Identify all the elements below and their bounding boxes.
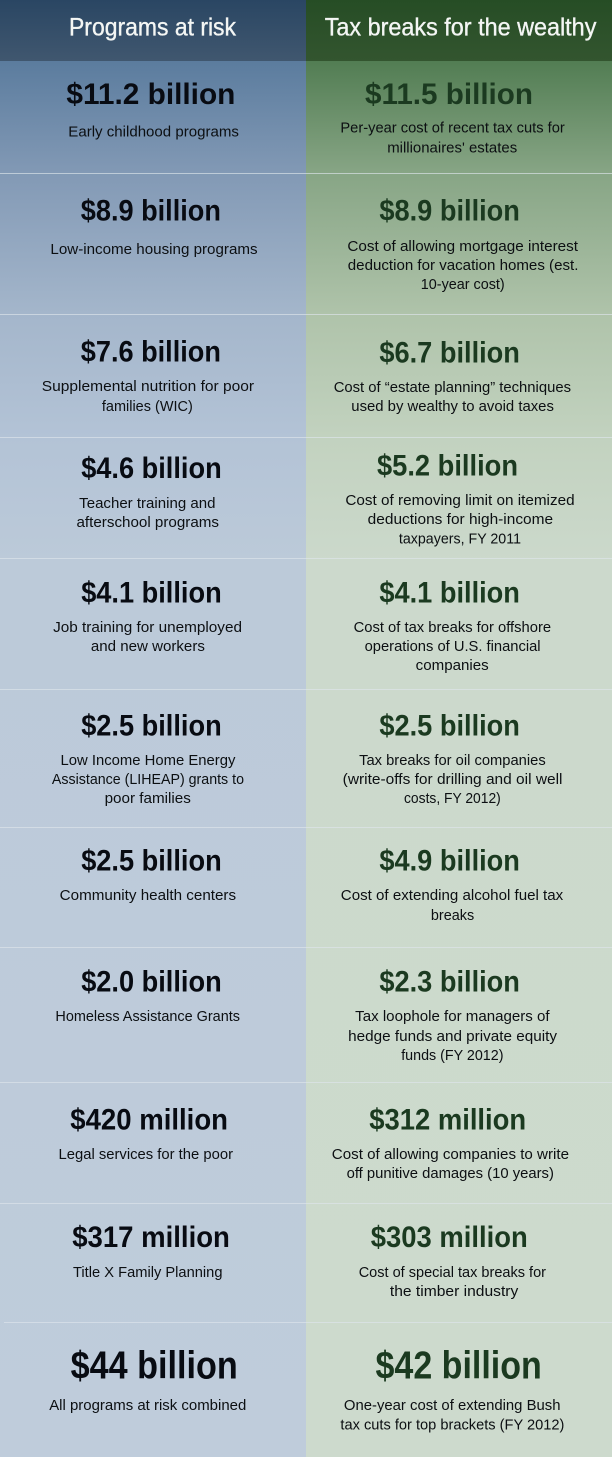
row 9 left: legal services: $420 million [70,1104,228,1137]
row 2 left: low-income housing: Low-income housing programs [50,241,258,258]
row 3 right: estate planning: $6.7 billion [379,336,520,369]
row 8 right: hedge fund loophole [348,965,558,1064]
row 4 right: itemized deductions limit: taxpayers, FY 2011 [399,530,521,548]
row 1 right: millionaires' estates tax cuts [340,78,565,157]
row 4 right: itemized deductions limit [345,449,575,548]
row 3 right: estate planning [334,336,571,415]
row 8 left: homeless assistance: Homeless Assistance Grants [55,1008,240,1025]
row 6 right: oil company tax breaks: Tax breaks for oil companies [359,752,546,769]
header: tax breaks for the wealthy: Tax breaks for the wealthy [325,14,597,42]
row 5 right: offshore tax breaks: companies [416,657,489,674]
row 7 right: alcohol fuel tax breaks: $4.9 billion [379,845,520,878]
row 9 right: punitive damages write-off [332,1104,569,1182]
row 7 left: community health centers [60,845,236,904]
row 3 right: estate planning: used by wealthy to avoid taxes [351,398,554,415]
row 7 left: community health centers: Community health centers [60,887,236,904]
row 1 right: millionaires' estates tax cuts: Per-year cost of recent tax cuts for [340,120,565,137]
row 3 right: estate planning: Cost of “estate planning” techniques [334,379,571,396]
row 10 right: timber industry tax breaks: Cost of special tax breaks for [359,1264,546,1281]
row 10 left: title X family planning: $317 million [72,1221,230,1254]
row 2 left: low-income housing [50,195,258,258]
row 2 right: mortgage interest deduction: Cost of allowing mortgage interest [347,238,579,255]
total left: all programs at risk combined [49,1345,246,1414]
row 5 right: offshore tax breaks: Cost of tax breaks for offshore [354,619,551,636]
row 8 right: hedge fund loophole: funds (FY 2012) [401,1047,504,1064]
row 7 left: community health centers: $2.5 billion [81,845,222,878]
row 9 right: punitive damages write-off: $312 million [369,1104,526,1137]
row 4 left: teacher training: Teacher training and [79,495,216,512]
row 5 left: job training: and new workers [91,638,205,655]
row 1 right: millionaires' estates tax cuts: millionaires' estates [387,140,517,157]
header: programs at risk: Programs at risk [69,14,236,42]
row 2 right: mortgage interest deduction: 10-year cost) [421,276,505,293]
header: tax breaks for the wealthy [306,0,612,61]
row 4 right: itemized deductions limit: deductions for high-income [368,511,553,528]
row 1 left: early childhood programs [66,78,239,141]
row 6 right: oil company tax breaks: costs, FY 2012) [404,790,501,807]
row 6 left: LIHEAP grants [52,710,244,807]
row 8 right: hedge fund loophole: hedge funds and private equity [348,1028,558,1045]
row 10 left: title X family planning: Title X Family Planning [73,1264,222,1281]
row 2 left: low-income housing: $8.9 billion [81,195,221,228]
row 3 left: supplemental nutrition: $7.6 billion [81,335,221,368]
row 1 left: early childhood programs: Early childhood programs [68,124,239,141]
row 7 right: alcohol fuel tax breaks: Cost of extending alcohol fuel tax [341,887,564,904]
row 5 right: offshore tax breaks [354,577,551,674]
row 1 left: early childhood programs: $11.2 billion [66,78,235,111]
row 10 right: timber industry tax breaks: the timber industry [390,1283,519,1300]
total right: extending Bush tax cuts: $42 billion [376,1345,542,1388]
row 10 right: timber industry tax breaks [359,1221,546,1300]
row 9 left: legal services: Legal services for the poor [58,1146,233,1163]
row 6 right: oil company tax breaks: (write-offs for drilling and oil well [343,771,562,788]
row 8 left: homeless assistance [55,965,240,1025]
row 2 right: mortgage interest deduction [347,195,579,293]
row 1 right: millionaires' estates tax cuts: $11.5 billion [365,78,533,111]
row 6 left: LIHEAP grants: Low Income Home Energy [60,752,236,769]
row 8 left: homeless assistance: $2.0 billion [81,965,222,998]
total left: all programs at risk combined: $44 billion [71,1345,238,1388]
row 6 right: oil company tax breaks: $2.5 billion [379,710,520,743]
row 5 left: job training: $4.1 billion [81,577,222,610]
row 5 left: job training [53,577,242,655]
row 3 left: supplemental nutrition: Supplemental nutrition for poor [42,378,254,395]
panel: programs at risk column background [0,61,306,1457]
panel: tax breaks column background [306,61,612,1457]
row 9 left: legal services [58,1104,233,1163]
row 4 right: itemized deductions limit: $5.2 billion [377,449,518,482]
row 9 right: punitive damages write-off: Cost of allowing companies to write [332,1146,569,1163]
row 3 left: supplemental nutrition: families (WIC) [102,398,193,415]
total right: extending Bush tax cuts [340,1345,564,1434]
row 4 left: teacher training [76,452,222,531]
row 6 left: LIHEAP grants: poor families [105,790,191,807]
row 5 right: offshore tax breaks: operations of U.S. financial [365,638,541,655]
row 4 left: teacher training: afterschool programs [76,514,219,531]
row 10 left: title X family planning [72,1221,230,1281]
row 4 right: itemized deductions limit: Cost of removing limit on itemized [345,492,575,509]
row 8 right: hedge fund loophole: Tax loophole for managers of [355,1008,550,1025]
row 5 right: offshore tax breaks: $4.1 billion [379,577,520,610]
row 7 right: alcohol fuel tax breaks: breaks [431,907,474,924]
row 5 left: job training: Job training for unemployed [53,619,242,636]
row 6 right: oil company tax breaks [343,710,562,807]
row 2 right: mortgage interest deduction: $8.9 billion [379,195,520,228]
row 9 right: punitive damages write-off: off punitive damages (10 years) [347,1165,554,1182]
header: programs at risk [0,0,306,61]
row 6 left: LIHEAP grants: $2.5 billion [81,710,222,743]
row 7 right: alcohol fuel tax breaks [341,845,564,924]
row 3 left: supplemental nutrition [42,335,254,415]
total right: extending Bush tax cuts: One-year cost of extending Bush [344,1397,560,1414]
row 2 right: mortgage interest deduction: deduction for vacation homes (est. [348,257,578,274]
row 6 left: LIHEAP grants: Assistance (LIHEAP) grants to [52,771,244,788]
row 4 left: teacher training: $4.6 billion [81,452,222,485]
row 10 right: timber industry tax breaks: $303 million [371,1221,528,1254]
total left: all programs at risk combined: All programs at risk combined [49,1397,246,1414]
row 8 right: hedge fund loophole: $2.3 billion [379,965,520,998]
total right: extending Bush tax cuts: tax cuts for top brackets (FY 2012) [340,1417,564,1434]
